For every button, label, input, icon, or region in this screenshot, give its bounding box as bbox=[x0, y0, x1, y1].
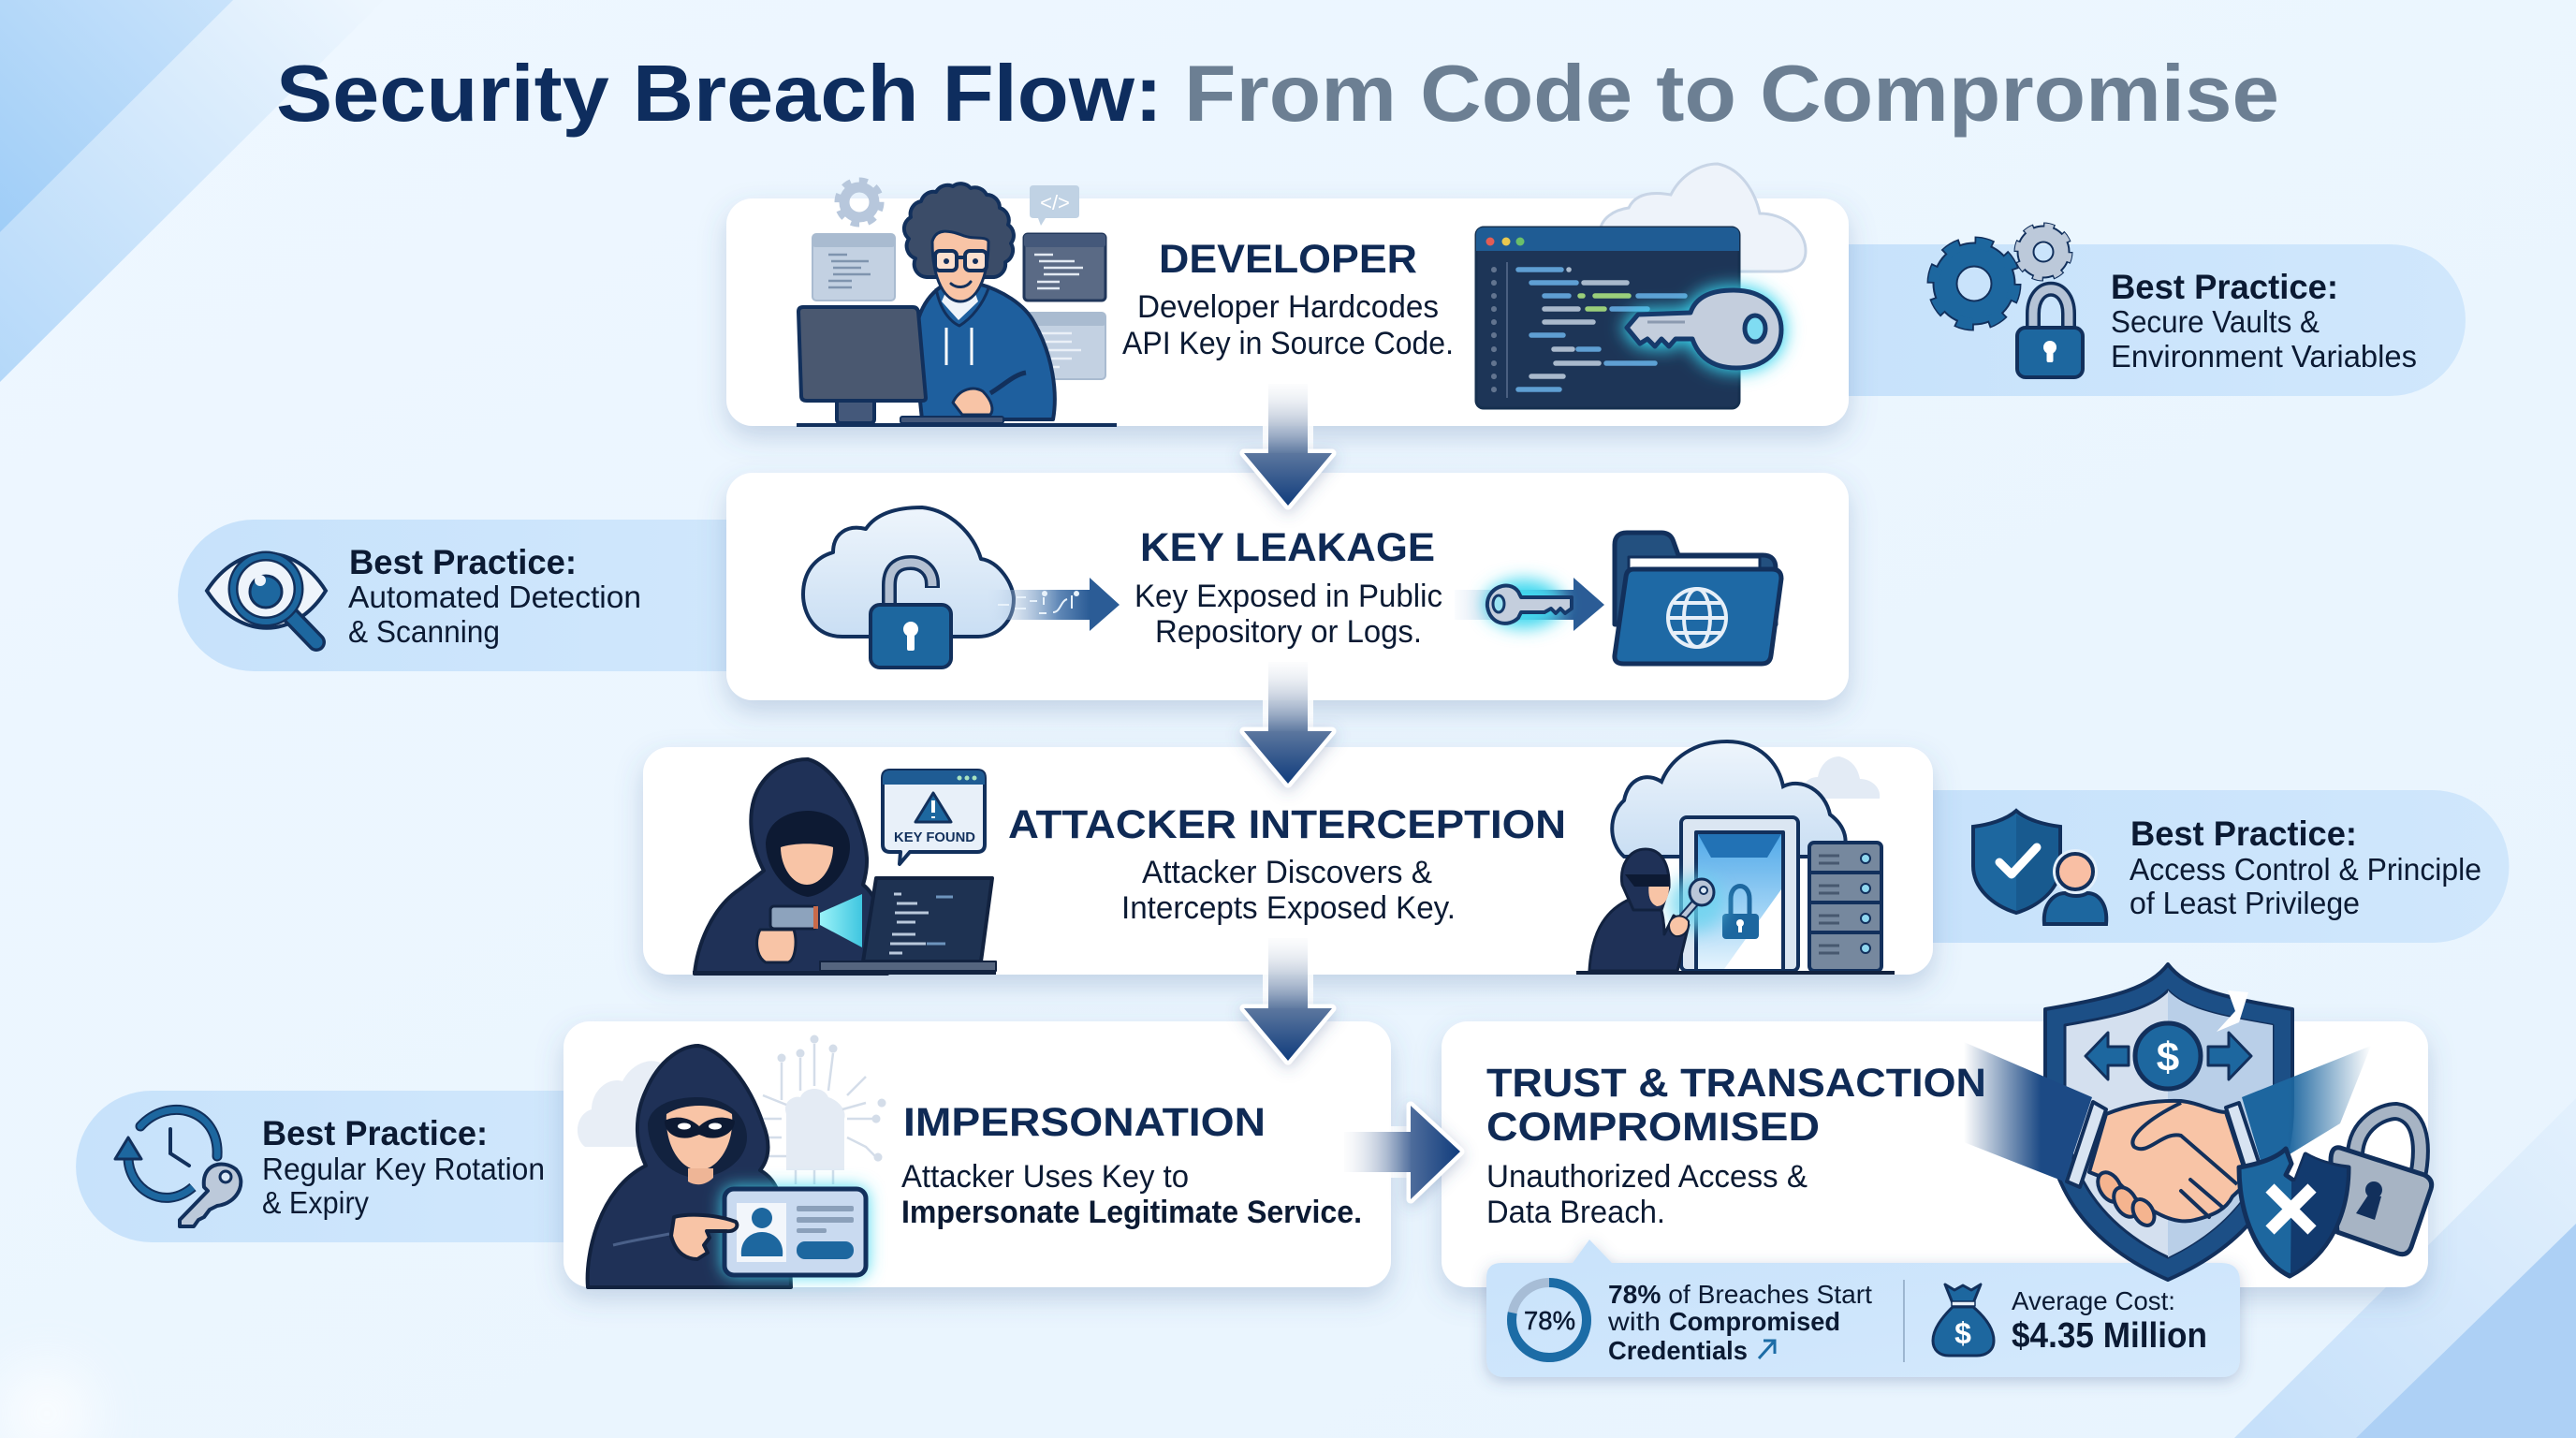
icon: shield with user bbox=[1973, 811, 2106, 924]
icon: background cloud bbox=[1600, 164, 1806, 271]
title: Security Breach Flow: bbox=[276, 50, 1163, 139]
text: developer description: API Key in Source Code. bbox=[1122, 326, 1454, 361]
text: impersonation description: Attacker Uses Key to bbox=[901, 1159, 1189, 1195]
icon: glowing id card bbox=[723, 1187, 868, 1276]
text: developer description: Developer Hardcodes bbox=[1137, 289, 1439, 325]
panel: trust and transaction compromised bbox=[1442, 964, 2432, 1377]
icon: eye with magnifier bbox=[207, 553, 326, 642]
icon: cloud behind gateway bbox=[1612, 741, 1846, 857]
icon: background cloud and circuit bbox=[578, 1039, 882, 1184]
text: breach statistic: Credentials bbox=[1608, 1336, 1748, 1365]
icon: monitor bbox=[797, 307, 1117, 427]
best practice: access control bbox=[1919, 790, 2509, 943]
text: trust description: Data Breach. bbox=[1486, 1195, 1665, 1230]
text: attacker description: Attacker Discovers & bbox=[1142, 855, 1432, 890]
character: hooded impersonator bbox=[588, 1046, 791, 1287]
heading: trust and transaction compromised: TRUST & TRANSACTION bbox=[1486, 1061, 1986, 1106]
arrow: developer to key leakage bbox=[1244, 384, 1332, 506]
callout: key found: KEY FOUND bbox=[894, 830, 975, 845]
arrow: impersonation to trust bbox=[1344, 1106, 1460, 1199]
character: hooded attacker with scanner bbox=[695, 759, 887, 974]
text: key leakage description: Key Exposed in Public bbox=[1134, 579, 1442, 614]
heading: trust and transaction compromised: COMPROMISED bbox=[1486, 1105, 1820, 1150]
text: automated detection bbox=[348, 543, 641, 649]
text: access control: Best Practice: bbox=[2130, 814, 2357, 853]
panel: impersonation bbox=[564, 1021, 1391, 1287]
icon: code bubble: </> bbox=[1040, 191, 1070, 214]
title bbox=[276, 50, 2279, 139]
chart: 78 percent ring bbox=[1512, 1283, 1587, 1357]
icon: server rack bbox=[1809, 843, 1881, 971]
heading: developer: DEVELOPER bbox=[1159, 237, 1417, 282]
icon: code windows bbox=[812, 234, 1105, 379]
icon: background gear bbox=[838, 181, 881, 224]
icon: gateway door bbox=[1681, 817, 1798, 971]
icon: background small cloud bbox=[1804, 756, 1880, 799]
text: key rotation bbox=[262, 1114, 545, 1220]
best practice: automated detection bbox=[178, 520, 739, 671]
icon: gears and padlock bbox=[1934, 227, 2083, 377]
text: breach statistic: 78% of Breaches Start bbox=[1608, 1280, 1872, 1309]
text: key rotation: Regular Key Rotation bbox=[262, 1152, 545, 1186]
text: breach statistic: Compromised bbox=[1669, 1307, 1840, 1336]
panel: developer bbox=[726, 164, 1849, 427]
icon: money bag: $ bbox=[1954, 1316, 1971, 1350]
chart: 78 percent ring: 78% bbox=[1524, 1306, 1575, 1335]
text: developer description bbox=[1122, 289, 1454, 361]
text: trust description bbox=[1486, 1159, 1808, 1230]
heading: attacker interception: ATTACKER INTERCEPTION bbox=[1008, 802, 1566, 847]
text: key leakage description bbox=[1134, 579, 1442, 650]
text: average cost bbox=[2012, 1286, 2207, 1356]
icon: code bubble bbox=[1030, 185, 1079, 226]
icon: broken shield with handshake: $ bbox=[2157, 1034, 2179, 1080]
text: key rotation: Best Practice: bbox=[262, 1114, 488, 1152]
text: secure vaults: Best Practice: bbox=[2111, 268, 2338, 306]
title: From Code to Compromise bbox=[1184, 50, 2279, 139]
heading: key leakage: KEY LEAKAGE bbox=[1140, 525, 1435, 570]
text: secure vaults: Secure Vaults & bbox=[2111, 304, 2320, 339]
text: automated detection: Best Practice: bbox=[349, 543, 577, 581]
text: secure vaults bbox=[2111, 268, 2417, 374]
heading: trust and transaction compromised bbox=[1486, 1061, 1986, 1150]
heading: impersonation: IMPERSONATION bbox=[903, 1100, 1266, 1145]
icon: grey padlock bbox=[2331, 1111, 2432, 1255]
arrow: data stream bbox=[988, 578, 1120, 631]
text: trust description: Unauthorized Access & bbox=[1486, 1159, 1808, 1195]
text: secure vaults: Environment Variables bbox=[2111, 339, 2417, 374]
text: key leakage description: Repository or Logs. bbox=[1155, 614, 1422, 650]
callout: key found bbox=[883, 770, 985, 864]
arrow: attacker to impersonation bbox=[1244, 938, 1332, 1061]
icon: pointing hand bbox=[671, 1215, 737, 1259]
icon: broken shield with handshake bbox=[1964, 964, 2371, 1280]
icon: door padlock bbox=[1722, 886, 1759, 939]
icon: laptop bbox=[693, 878, 996, 975]
text: attacker description: Intercepts Exposed Key. bbox=[1121, 890, 1456, 926]
text: breach statistic bbox=[1607, 1280, 1872, 1365]
text: access control: of Least Privilege bbox=[2130, 886, 2360, 920]
text: key rotation: & Expiry bbox=[262, 1185, 369, 1220]
character: developer bbox=[904, 183, 1055, 419]
panel: key leakage bbox=[726, 473, 1849, 700]
text: attacker description bbox=[1121, 855, 1456, 926]
text: breach statistic: with bbox=[1607, 1307, 1661, 1336]
icon: public folder bbox=[1615, 533, 1781, 664]
text: access control bbox=[2130, 814, 2481, 920]
divider bbox=[1903, 1280, 1905, 1362]
icon: money bag bbox=[1933, 1284, 1994, 1356]
text: impersonation description: Impersonate Legitimate Service. bbox=[901, 1195, 1362, 1230]
icon: glowing key bbox=[1627, 290, 1781, 368]
icon: code window bbox=[1476, 227, 1739, 408]
character: masked thief with key bbox=[1589, 849, 1724, 971]
icon: cloud with open lock bbox=[803, 507, 1014, 668]
text: impersonation description bbox=[901, 1159, 1362, 1230]
icon: leaked key bbox=[1485, 580, 1572, 628]
icon: broken small shield bbox=[2239, 1149, 2349, 1276]
arrow: key stream bbox=[1455, 578, 1604, 631]
text: access control: Access Control & Principle bbox=[2130, 852, 2481, 887]
text: automated detection: & Scanning bbox=[348, 614, 500, 649]
decorative ground bbox=[1576, 971, 1895, 975]
stats panel bbox=[1486, 1240, 2240, 1377]
text: automated detection: Automated Detection bbox=[348, 580, 641, 614]
arrow: key leakage to attacker bbox=[1244, 662, 1332, 784]
best practice: key rotation bbox=[76, 1091, 576, 1242]
text: average cost: Average Cost: bbox=[2012, 1286, 2175, 1315]
icon: clock rotation with key bbox=[115, 1109, 241, 1226]
panel: attacker interception bbox=[643, 741, 1933, 975]
text: average cost: $4.35 Million bbox=[2012, 1316, 2207, 1356]
best practice: secure vaults bbox=[1825, 227, 2466, 396]
